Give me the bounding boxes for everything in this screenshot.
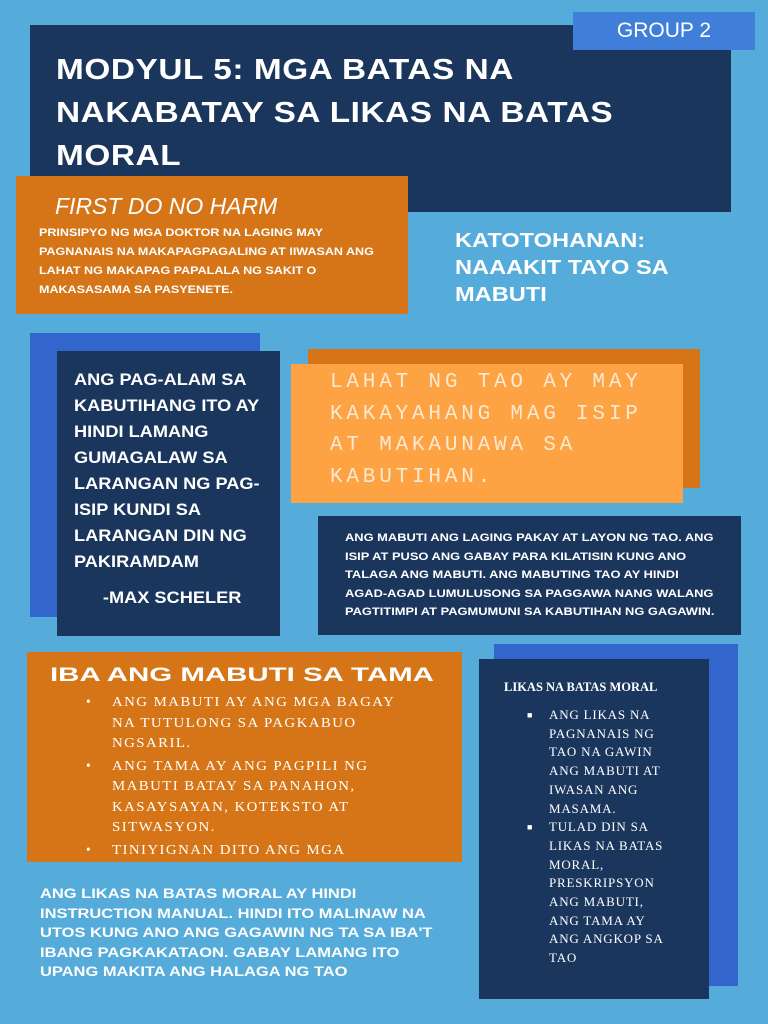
bullet list: LIKAS NA BATAS: [549, 838, 663, 853]
heading: FIRST DO NO HARM: [55, 193, 277, 219]
katotohanan text: [455, 230, 669, 306]
bullet list: ANG LIKAS NA: [549, 707, 650, 722]
bullet list: ANG TAMA AY ANG PAGPILI NG: [112, 758, 368, 772]
katotohanan text: NAAAKIT TAYO SA: [455, 257, 669, 279]
bullet list: TINIYIGNAN DITO ANG MGA: [112, 842, 345, 856]
bullet list: MABUTI BATAY SA PANAHON,: [112, 778, 356, 793]
bullet list: IWASAN ANG: [549, 782, 638, 797]
panel: iba ang mabuti: [27, 652, 462, 862]
bullet list: ANG MABUTI AY ANG MGA BAGAY: [112, 694, 395, 709]
bullet list: [86, 694, 395, 856]
panel: likas na batas moral: ■: [527, 710, 533, 720]
panel: ang mabuti: AGAD-AGAD LUMULUSONG SA PAGGAWA NANG WALANG: [345, 588, 713, 600]
bullet list: TAO NA GAWIN: [549, 744, 653, 759]
bullet list: NGSARIL.: [112, 735, 192, 750]
panel: iba ang mabuti: •: [86, 842, 92, 856]
group label: GROUP 2: [617, 19, 711, 42]
panel: lahat ng tao: [291, 364, 683, 503]
quote shadow: [30, 333, 260, 617]
text block: LAHAT NG MAKAPAG PAPALALA NG SAKIT O: [39, 265, 316, 277]
bottom text: INSTRUCTION MANUAL. HINDI ITO MALINAW NA: [40, 906, 426, 920]
panel: ang mabuti: PAGTITIMPI AT PAGMUMUNI SA KABUTIHAN NG GAGAWIN.: [345, 606, 714, 618]
panel: ang mabuti: ISIP AT PUSO ANG GABAY PARA KILATISIN KUNG ANO: [345, 550, 686, 562]
panel: scheler quote: [57, 351, 280, 636]
text block: PAGNANAIS NA MAKAPAGPAGALING AT IIWASAN ANG: [39, 246, 374, 258]
panel: scheler quote: KABUTIHANG ITO AY: [74, 396, 259, 415]
panel: iba ang mabuti: •: [86, 758, 92, 772]
group label: [573, 12, 755, 50]
panel: ang mabuti: [318, 516, 741, 635]
bullet list: MASAMA.: [549, 801, 616, 816]
panel: scheler quote: -MAX SCHELER: [103, 588, 241, 607]
panel: lahat ng tao: LAHAT NG TAO AY MAY: [330, 371, 642, 394]
heading: LIKAS NA BATAS MORAL: [504, 680, 657, 694]
panel: lahat ng tao: KABUTIHAN.: [330, 466, 494, 488]
bullet list: ANG MABUTI AT: [549, 763, 661, 778]
panel: scheler quote: GUMAGALAW SA: [74, 448, 228, 467]
panel: likas na batas moral: [479, 659, 709, 999]
panel: first do no harm: [16, 176, 408, 314]
panel: scheler quote: HINDI LAMANG: [74, 422, 208, 441]
bullet list: KASAYSAYAN, KOTEKSTO AT: [112, 798, 349, 814]
bullet list: TULAD DIN SA: [549, 819, 649, 834]
text block: [39, 227, 374, 296]
likas shadow: [494, 644, 738, 986]
panel: scheler quote: LARANGAN NG PAG-: [74, 474, 260, 493]
bottom text: UTOS KUNG ANO ANG GAGAWIN NG TA SA IBA'T: [40, 925, 432, 940]
katotohanan text: KATOTOHANAN:: [455, 230, 645, 252]
panel: scheler quote: ISIP KUNDI SA: [74, 500, 201, 519]
panel: ang mabuti: ANG MABUTI ANG LAGING PAKAY AT LAYON NG TAO. ANG: [345, 532, 713, 544]
title panel: [30, 25, 731, 212]
panel: likas na batas moral: ■: [527, 822, 533, 832]
title panel: MODYUL 5: MGA BATAS NA: [56, 54, 514, 86]
orange shadow: [308, 349, 700, 488]
bullet list: NA TUTULONG SA PAGKABUO: [112, 714, 357, 730]
panel: scheler quote: PAKIRAMDAM: [74, 552, 199, 571]
bullet list: PAGNANAIS NG: [549, 726, 655, 741]
bullet list: PRESKRIPSYON: [549, 875, 655, 890]
text block: PRINSIPYO NG MGA DOKTOR NA LAGING MAY: [39, 227, 323, 239]
bullet list: SITWASYON.: [112, 819, 216, 834]
text block: MAKASASAMA SA PASYENETE.: [39, 284, 233, 296]
bottom text: IBANG PAGKAKATAON. GABAY LAMANG ITO: [40, 944, 399, 960]
title panel: NAKABATAY SA LIKAS NA BATAS: [56, 97, 613, 129]
title panel: MORAL: [56, 140, 181, 172]
katotohanan text: MABUTI: [455, 284, 547, 306]
panel: lahat ng tao: KAKAYAHANG MAG ISIP: [330, 402, 642, 426]
bottom text: UPANG MAKITA ANG HALAGA NG TAO: [40, 964, 347, 979]
bottom text: [40, 886, 432, 979]
panel: scheler quote: LARANGAN DIN NG: [74, 526, 247, 545]
bullet list: ANG MABUTI,: [549, 894, 644, 909]
panel: iba ang mabuti: •: [86, 694, 92, 709]
bullet list: [527, 707, 664, 965]
bottom text: ANG LIKAS NA BATAS MORAL AY HINDI: [40, 886, 356, 901]
heading: IBA ANG MABUTI SA TAMA: [50, 665, 434, 686]
bullet list: ANG TAMA AY: [549, 913, 646, 928]
panel: ang mabuti: TALAGA ANG MABUTI. ANG MABUTING TAO AY HINDI: [345, 569, 679, 581]
bullet list: ANG ANGKOP SA: [549, 931, 664, 946]
bullet list: MORAL,: [549, 857, 604, 872]
panel: scheler quote: ANG PAG-ALAM SA: [74, 370, 246, 389]
panel: lahat ng tao: AT MAKAUNAWA SA: [330, 434, 576, 457]
bullet list: TAO: [549, 950, 577, 965]
